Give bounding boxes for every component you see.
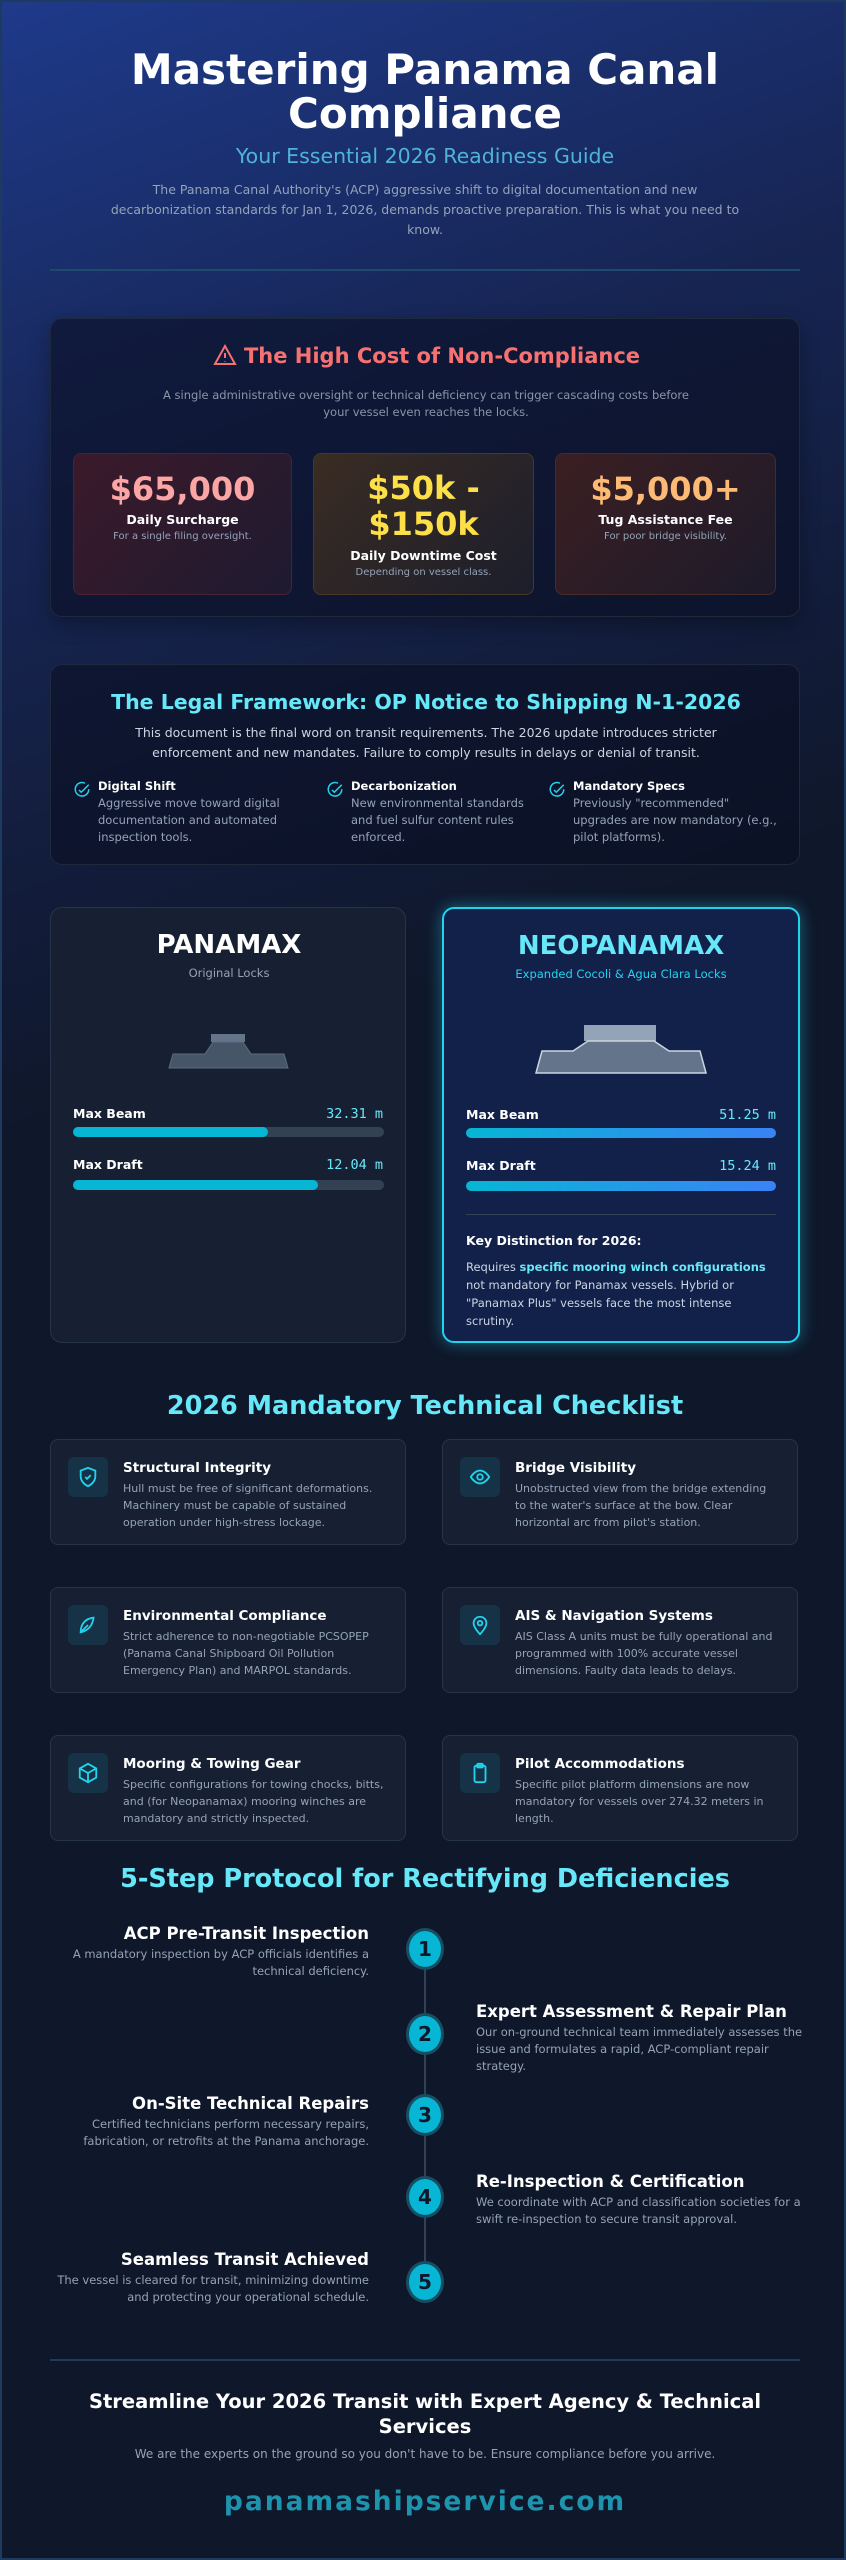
icon: warning <box>213 344 237 365</box>
step 4 <box>476 2172 801 2226</box>
timeline: 4 <box>418 2185 432 2209</box>
card: tug: For poor bridge visibility. <box>604 531 727 542</box>
heading: 5-step protocol: 5-Step Protocol for Rectifying Deficiencies <box>120 1864 730 1894</box>
step 3 <box>83 2094 369 2148</box>
step 3: Certified technicians perform necessary repairs, fabrication, or retrofits at the Panama anchorage. <box>83 2117 369 2148</box>
text: key distinction: Key Distinction for 2026: <box>466 1233 642 1248</box>
panel: cost of non-compliance <box>50 318 800 617</box>
heading: checklist: 2026 Mandatory Technical Checklist <box>167 1391 683 1421</box>
stat: max draft: Max Draft <box>466 1158 536 1173</box>
panel: panamax: 12.04 m <box>326 1157 383 1173</box>
panel: panamax: 32.31 m <box>326 1106 383 1122</box>
step 5: The vessel is cleared for transit, minimizing downtime and protecting your operational schedule. <box>57 2273 369 2304</box>
item: decarbonization <box>328 779 524 844</box>
panel: legal framework <box>50 664 800 865</box>
icon: box <box>68 1753 108 1793</box>
card: surcharge: For a single filing oversight. <box>113 531 252 542</box>
item: decarbonization: Decarbonization <box>351 779 457 793</box>
panel: neopanamax: 15.24 m <box>719 1158 776 1174</box>
card: surcharge: $65,000 <box>110 470 255 508</box>
icon: leaf <box>68 1605 108 1645</box>
heading: panamax: PANAMAX <box>157 930 301 960</box>
footer url: panamashipservice.com <box>224 2486 626 2517</box>
footer text: We are the experts on the ground so you don't have to be. Ensure compliance before you arrive. <box>135 2447 715 2461</box>
card: AIS: AIS Class A units must be fully operational and programmed with 100% accurate vessel dimensions. Faulty data leads to delays. <box>515 1630 772 1677</box>
item: decarbonization: New environmental standards and fuel sulfur content rules enforced. <box>351 796 524 844</box>
text: intro: A single administrative oversight or technical deficiency can trigger cascading costs before your vessel even reaches the locks. <box>163 388 689 419</box>
icon: eye <box>460 1457 500 1497</box>
heading: high cost: The High Cost of Non-Compliance <box>244 344 640 368</box>
item: mandatory specs: Mandatory Specs <box>573 779 685 793</box>
text: legal intro: This document is the final word on transit requirements. The 2026 update introduces stricter enforcement and new mandates. Failure to comply results in delays or denial of transit. <box>135 725 717 760</box>
card: downtime: Depending on vessel class. <box>356 567 491 578</box>
step 2 <box>476 2002 802 2073</box>
card: mooring <box>50 1735 406 1841</box>
card: downtime: Daily Downtime Cost <box>350 548 497 563</box>
step 5 <box>57 2250 369 2304</box>
card: bridge visibility: Bridge Visibility <box>515 1460 636 1476</box>
panel: panamax <box>50 907 406 1343</box>
timeline: 5 <box>418 2270 432 2294</box>
icon: clipboard <box>460 1753 500 1793</box>
heading: legal framework: The Legal Framework: OP Notice to Shipping N-1-2026 <box>111 690 741 714</box>
card: pilot accommodations <box>442 1735 798 1841</box>
card: AIS: AIS & Navigation Systems <box>515 1608 713 1624</box>
card: structural integrity: Structural Integrity <box>123 1460 271 1476</box>
card: tug: Tug Assistance Fee <box>598 512 733 527</box>
step 4: Re-Inspection & Certification <box>476 2172 744 2191</box>
item: mandatory specs: Previously "recommended" upgrades are now mandatory (e.g., pilot platforms). <box>573 796 777 844</box>
timeline: 2 <box>418 2022 432 2046</box>
item: digital shift: Digital Shift <box>98 779 176 793</box>
stat: max draft: Max Draft <box>73 1157 143 1172</box>
subtitle: Your Essential 2026 Readiness Guide <box>236 144 614 168</box>
item: digital shift <box>74 779 280 844</box>
card: downtime <box>313 453 534 595</box>
icon: shield <box>68 1457 108 1497</box>
step 2: Expert Assessment & Repair Plan <box>476 2002 787 2021</box>
intro text: The Panama Canal Authority's (ACP) aggressive shift to digital documentation and new decarbonization standards for Jan 1, 2026, demands proactive preparation. This is what you need to know. <box>111 182 739 237</box>
text: key distinction: Requires specific mooring winch configurations not mandatory for Panamax vessels. Hybrid or "Panamax Plus" vessels face the most intense scrutiny. <box>466 1260 766 1328</box>
card: tug: $5,000+ <box>590 470 741 508</box>
card: environmental compliance: Strict adherence to non-negotiable PCSOPEP (Panama Canal Shipboard Oil Pollution Emergency Plan) and MARPOL standards. <box>123 1630 369 1677</box>
step 3: On-Site Technical Repairs <box>132 2094 369 2113</box>
card: structural integrity <box>50 1439 406 1545</box>
card: surcharge: Daily Surcharge <box>126 512 239 527</box>
timeline: 3 <box>418 2103 432 2127</box>
card: downtime: $50k - <box>367 469 480 507</box>
timeline: 1 <box>418 1937 432 1961</box>
stat: max beam: Max Beam <box>466 1107 539 1122</box>
text: expanded locks: Expanded Cocoli & Agua Clara Locks <box>515 967 727 981</box>
card: pilot accommodations: Specific pilot platform dimensions are now mandatory for vessels over 274.32 meters in length. <box>515 1778 764 1825</box>
card: mooring: Specific configurations for towing chocks, bitts, and (for Neopanamax) mooring winches are mandatory and strictly inspected. <box>123 1778 383 1825</box>
icon: map pin <box>460 1605 500 1645</box>
card: downtime: $150k <box>368 505 479 543</box>
stat: max beam: Max Beam <box>73 1106 146 1121</box>
card: AIS <box>442 1587 798 1693</box>
card: environmental compliance <box>50 1587 406 1693</box>
text: original locks: Original Locks <box>189 966 269 980</box>
card: mooring: Mooring & Towing Gear <box>123 1756 300 1772</box>
panel: neopanamax: 51.25 m <box>719 1107 776 1123</box>
step 1 <box>73 1924 369 1978</box>
panel: neopanamax <box>442 907 800 1343</box>
footer heading: Streamline Your 2026 Transit with Expert Agency & Technical Services <box>89 2390 761 2438</box>
card: bridge visibility: Unobstructed view from the bridge extending to the water's surface at the bow. Clear horizontal arc from pilot's station. <box>515 1482 766 1529</box>
item: mandatory specs <box>550 779 777 844</box>
icon: neopanamax ship <box>535 1025 707 1074</box>
step 5: Seamless Transit Achieved <box>121 2250 369 2269</box>
card: bridge visibility <box>442 1439 798 1545</box>
title: Mastering Panama Canal Compliance <box>131 45 719 138</box>
item: digital shift: Aggressive move toward digital documentation and automated inspection tools. <box>98 796 280 844</box>
card: pilot accommodations: Pilot Accommodations <box>515 1756 684 1772</box>
card: structural integrity: Hull must be free of significant deformations. Machinery must be capable of sustained operation under high-stress lockage. <box>123 1482 372 1529</box>
step 2: Our on-ground technical team immediately assesses the issue and formulates a rapid, ACP-compliant repair strategy. <box>476 2025 802 2073</box>
card: surcharge <box>73 453 292 595</box>
card: tug <box>555 453 776 595</box>
icon: panamax ship <box>168 1034 289 1068</box>
card: environmental compliance: Environmental Compliance <box>123 1608 327 1624</box>
heading: neopanamax: NEOPANAMAX <box>518 931 724 961</box>
timeline <box>57 1924 802 2304</box>
step 1: A mandatory inspection by ACP officials identifies a technical deficiency. <box>73 1947 369 1978</box>
step 1: ACP Pre-Transit Inspection <box>124 1924 369 1943</box>
step 4: We coordinate with ACP and classification societies for a swift re-inspection to secure transit approval. <box>476 2195 801 2226</box>
